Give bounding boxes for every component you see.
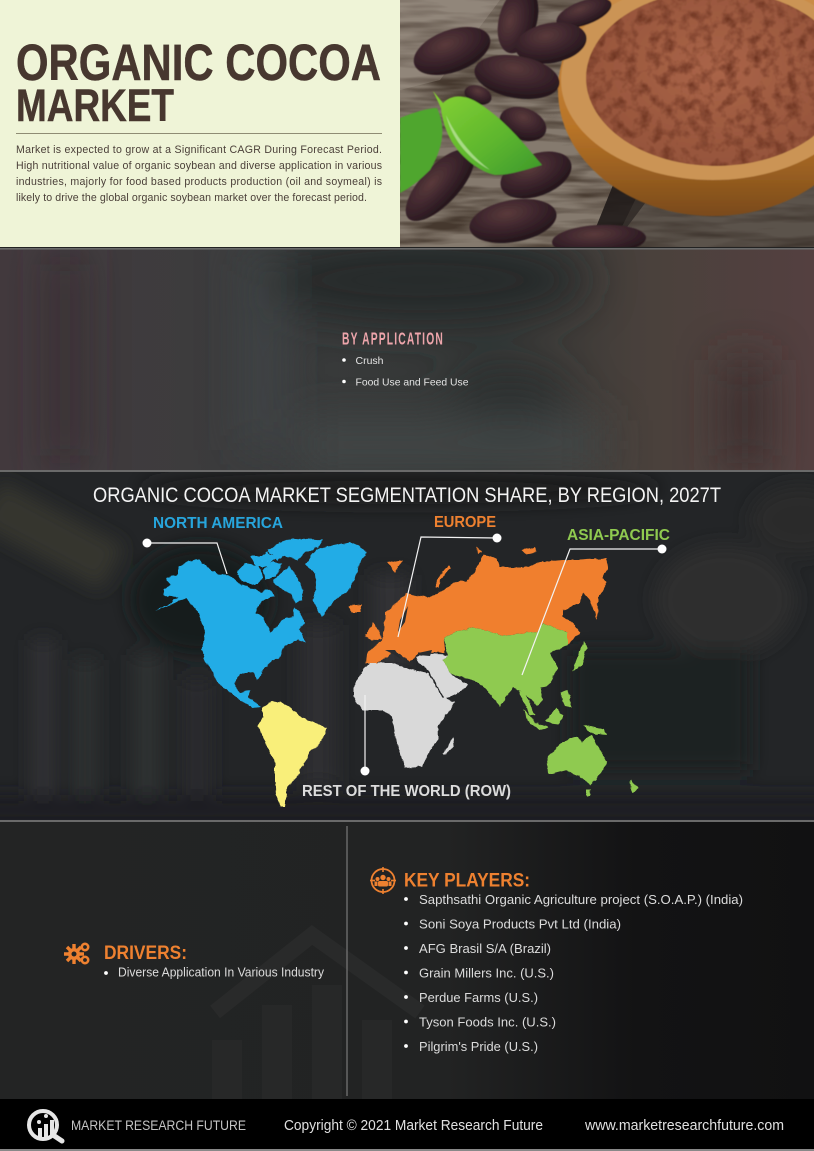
list: applications: Crush xyxy=(356,355,384,367)
panel: header text background xyxy=(0,0,400,247)
icon: gears xyxy=(64,944,88,964)
heading: map title: ORGANIC COCOA MARKET SEGMENTATION SHARE, BY REGION, 2027T xyxy=(93,483,721,507)
map: north america xyxy=(155,538,367,708)
label: asia-pacific: ASIA-PACIFIC xyxy=(567,527,670,544)
greenland xyxy=(305,542,367,617)
list: key players xyxy=(404,892,743,1054)
label: rest of the world: REST OF THE WORLD (ROW) xyxy=(302,783,511,800)
intro text: industries, majorly for food based products production (oil and soymeal) is xyxy=(16,176,382,188)
map: africa and middle east xyxy=(353,654,467,768)
photo: cocoa beans and powder bowl xyxy=(395,0,814,257)
list: key players: Pilgrim's Pride (U.S.) xyxy=(419,1039,538,1054)
intro text: High nutritional value of organic soybean and diverse application in various xyxy=(16,160,382,172)
label: north america: NORTH AMERICA xyxy=(153,515,283,532)
panel: by application background xyxy=(0,235,814,470)
divider: vertical xyxy=(346,826,348,1096)
cocoa powder xyxy=(586,0,814,166)
heading: by application: BY APPLICATION xyxy=(342,328,444,348)
map: south america xyxy=(258,701,327,807)
list: key players: Sapthsathi Organic Agriculture project (S.O.A.P.) (India) xyxy=(419,892,743,907)
heading: key players: KEY PLAYERS: xyxy=(404,870,530,892)
panel: drivers and key players background xyxy=(0,820,814,1100)
map: asia-pacific xyxy=(442,623,638,796)
icon: key players target xyxy=(370,867,396,894)
map: inland seas xyxy=(385,606,432,660)
label: europe: EUROPE xyxy=(434,514,496,531)
callout lines: region leaders xyxy=(147,537,662,771)
intro text: Market is expected to grow at a Significant CAGR During Forecast Period. xyxy=(16,144,382,156)
list: key players: Soni Soya Products Pvt Ltd (India) xyxy=(419,916,621,932)
title: ORGANIC COCOA xyxy=(16,34,381,91)
map: world regions xyxy=(155,538,638,807)
title xyxy=(16,34,381,131)
icon: market research future logo xyxy=(29,1111,62,1141)
panel: region map background xyxy=(0,470,814,825)
list: key players: Tyson Foods Inc. (U.S.) xyxy=(419,1014,556,1030)
footer: website: www.marketresearchfuture.com xyxy=(584,1118,784,1134)
panel: footer xyxy=(0,1099,814,1149)
intro text: likely to drive the global organic soybean market over the forecast period. xyxy=(16,192,367,204)
heading: drivers: DRIVERS: xyxy=(104,943,187,964)
intro text xyxy=(16,144,382,204)
leaves xyxy=(400,108,442,193)
header divider xyxy=(16,133,382,134)
list: key players: AFG Brasil S/A (Brazil) xyxy=(419,941,551,956)
bowl xyxy=(558,0,814,216)
footer: company name: MARKET RESEARCH FUTURE xyxy=(71,1117,246,1133)
list: key players: Grain Millers Inc. (U.S.) xyxy=(419,966,554,980)
list: applications xyxy=(342,355,469,388)
callout dots xyxy=(142,534,666,776)
footer: copyright: Copyright © 2021 Market Research Future xyxy=(284,1118,543,1134)
beans xyxy=(413,26,491,76)
list: key players: Perdue Farms (U.S.) xyxy=(419,990,538,1005)
list: applications: Food Use and Feed Use xyxy=(356,376,469,388)
title: MARKET xyxy=(16,80,174,131)
map: europe and russia xyxy=(349,547,608,663)
list: drivers: Diverse Application In Various Industry xyxy=(118,966,325,980)
